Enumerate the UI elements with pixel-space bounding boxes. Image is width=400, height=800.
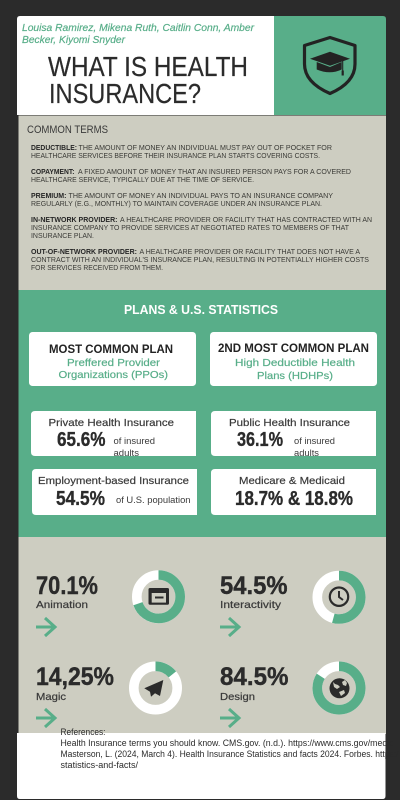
icon: calendar xyxy=(148,588,169,605)
title xyxy=(48,51,248,109)
donut: 70.1 percent xyxy=(137,575,180,618)
card: second most common plan: Plans (HDHPs) xyxy=(257,370,333,382)
card: public health insurance: adults xyxy=(294,448,320,458)
donut: 14.25 percent xyxy=(134,666,177,710)
references: Health Insurance terms you should know. CMS.gov. (n.d.). https://www.cms.gov/medic xyxy=(60,738,394,748)
term: deductible xyxy=(31,143,332,160)
card: second most common plan xyxy=(210,332,377,386)
card: second most common plan: 2ND MOST COMMON PLAN xyxy=(218,341,369,355)
card: most common plan: MOST COMMON PLAN xyxy=(49,342,173,356)
card: employment-based insurance: 54.5% xyxy=(56,488,105,510)
arrow xyxy=(220,709,239,727)
stat: design: Design xyxy=(220,691,255,703)
stat: animation: Animation xyxy=(36,599,88,611)
term: premium: REGULARLY (E.G., MONTHLY) TO MAINTAIN COVERAGE UNDER AN INSURANCE PLAN. xyxy=(31,199,322,208)
stat: magic xyxy=(36,663,177,727)
arrow xyxy=(36,709,55,727)
authors: Louisa Ramirez, Mikena Ruth, Caitlin Conn, Amber xyxy=(22,22,254,34)
panel: plans and statistics xyxy=(18,290,386,537)
arrow xyxy=(36,618,55,636)
stat: interactivity: 54.5% xyxy=(220,572,288,600)
icon: shield with graduation cap xyxy=(304,38,355,94)
term: in-network provider: INSURANCE COMPANY TO PROVIDE SERVICES AT NEGOTIATED RATES TO MEMBERS OF THAT xyxy=(31,223,349,232)
card: most common plan: Organizations (PPOs) xyxy=(58,369,168,381)
term: deductible: DEDUCTIBLE: xyxy=(31,143,77,152)
term: copayment: COPAYMENT: xyxy=(31,167,74,176)
card: employment-based insurance: Employment-based Insurance xyxy=(38,475,189,487)
card: second most common plan: High Deductible Health xyxy=(235,357,355,369)
card: private health insurance: of insured xyxy=(114,436,155,446)
term: out-of-network provider: CONTRACT WITH AN INDIVIDUAL'S INSURANCE PLAN, RESULTING IN POTENTIALLY HIGHER COSTS xyxy=(31,255,369,264)
panel: header xyxy=(17,16,386,115)
icon: globe xyxy=(330,678,350,698)
term: in-network provider xyxy=(31,215,372,240)
term: premium: THE AMOUNT OF MONEY AN INDIVIDUAL PAYS TO AN INSURANCE COMPANY xyxy=(68,191,333,200)
term: premium: PREMIUM: xyxy=(31,191,66,200)
card: medicare and medicaid xyxy=(211,469,376,515)
card: medicare and medicaid: 18.7% & 18.8% xyxy=(235,488,353,510)
header white background xyxy=(17,16,274,115)
card: public health insurance xyxy=(211,411,376,458)
stat: interactivity: Interactivity xyxy=(220,599,282,611)
stat: design xyxy=(220,663,361,727)
term: in-network provider: IN-NETWORK PROVIDER: xyxy=(31,215,118,224)
icon: paper plane xyxy=(144,680,163,697)
title: INSURANCE? xyxy=(49,78,201,109)
references: References: xyxy=(60,727,106,737)
authors xyxy=(22,22,254,46)
term: copayment xyxy=(31,167,351,184)
references xyxy=(60,727,399,770)
stat: interactivity xyxy=(220,572,361,636)
card: private health insurance xyxy=(31,411,196,458)
term: deductible: HEALTHCARE SERVICES BEFORE THEIR INSURANCE PLAN STARTS COVERING COSTS. xyxy=(31,151,320,160)
card: private health insurance: 65.6% xyxy=(57,429,106,451)
stat: design: 84.5% xyxy=(220,663,288,691)
card: employment-based insurance xyxy=(32,469,197,515)
term: copayment: HEALTHCARE SERVICE, TYPICALLY DUE AT THE TIME OF SERVICE. xyxy=(31,175,254,184)
term: out-of-network provider: FOR SERVICES RECEIVED FROM THEM. xyxy=(31,263,163,272)
panel: statistics with donuts xyxy=(18,537,386,734)
donut: 54.5 percent xyxy=(317,576,361,619)
references: statistics-and-facts/ xyxy=(60,760,139,770)
term: out-of-network provider xyxy=(31,247,369,272)
panel: references background xyxy=(17,733,386,799)
panel: common terms xyxy=(18,116,386,290)
card: public health insurance: 36.1% xyxy=(237,429,283,451)
donut: 84.5 percent xyxy=(317,666,361,710)
term: out-of-network provider: OUT-OF-NETWORK PROVIDER: xyxy=(31,247,137,256)
card: employment-based insurance: of U.S. population xyxy=(116,495,190,505)
card: private health insurance: adults xyxy=(114,448,140,458)
card: public health insurance: Public Health Insurance xyxy=(229,417,350,429)
stat: magic: 14,25% xyxy=(36,663,114,691)
term: premium xyxy=(31,191,333,208)
card: public health insurance: of insured xyxy=(294,436,335,446)
references: Masterson, L. (2024, March 4). Health Insurance Statistics and facts 2024. Forbes. https:/ xyxy=(60,749,399,759)
stat: animation: 70.1% xyxy=(36,572,98,600)
term: copayment: A FIXED AMOUNT OF MONEY THAT AN INSURED PERSON PAYS FOR A COVERED xyxy=(78,167,351,176)
term: in-network provider: INSURANCE PLAN. xyxy=(31,231,94,240)
header green block xyxy=(274,16,386,115)
authors: Becker, Kiyomi Snyder xyxy=(22,34,125,46)
stat: magic: Magic xyxy=(36,691,66,703)
icon: clock xyxy=(330,588,348,606)
card: private health insurance: Private Health Insurance xyxy=(48,417,174,429)
heading: plans and U.S. statistics: PLANS & U.S. STATISTICS xyxy=(124,302,278,317)
term: in-network provider: A HEALTHCARE PROVIDER OR FACILITY THAT HAS CONTRACTED WITH AN xyxy=(120,215,372,224)
term: deductible: THE AMOUNT OF MONEY AN INDIVIDUAL MUST PAY OUT OF POCKET FOR xyxy=(78,143,332,152)
stat: animation xyxy=(36,572,180,636)
card: most common plan: Preffered Provider xyxy=(67,357,161,369)
arrow xyxy=(220,618,239,636)
term: out-of-network provider: A HEALTHCARE PROVIDER OR FACILITY THAT DOES NOT HAVE A xyxy=(140,247,361,256)
heading: common terms: COMMON TERMS xyxy=(27,124,108,136)
title: WHAT IS HEALTH xyxy=(48,51,248,82)
card: most common plan xyxy=(29,332,196,386)
card: medicare and medicaid: Medicare & Medicaid xyxy=(239,475,345,487)
